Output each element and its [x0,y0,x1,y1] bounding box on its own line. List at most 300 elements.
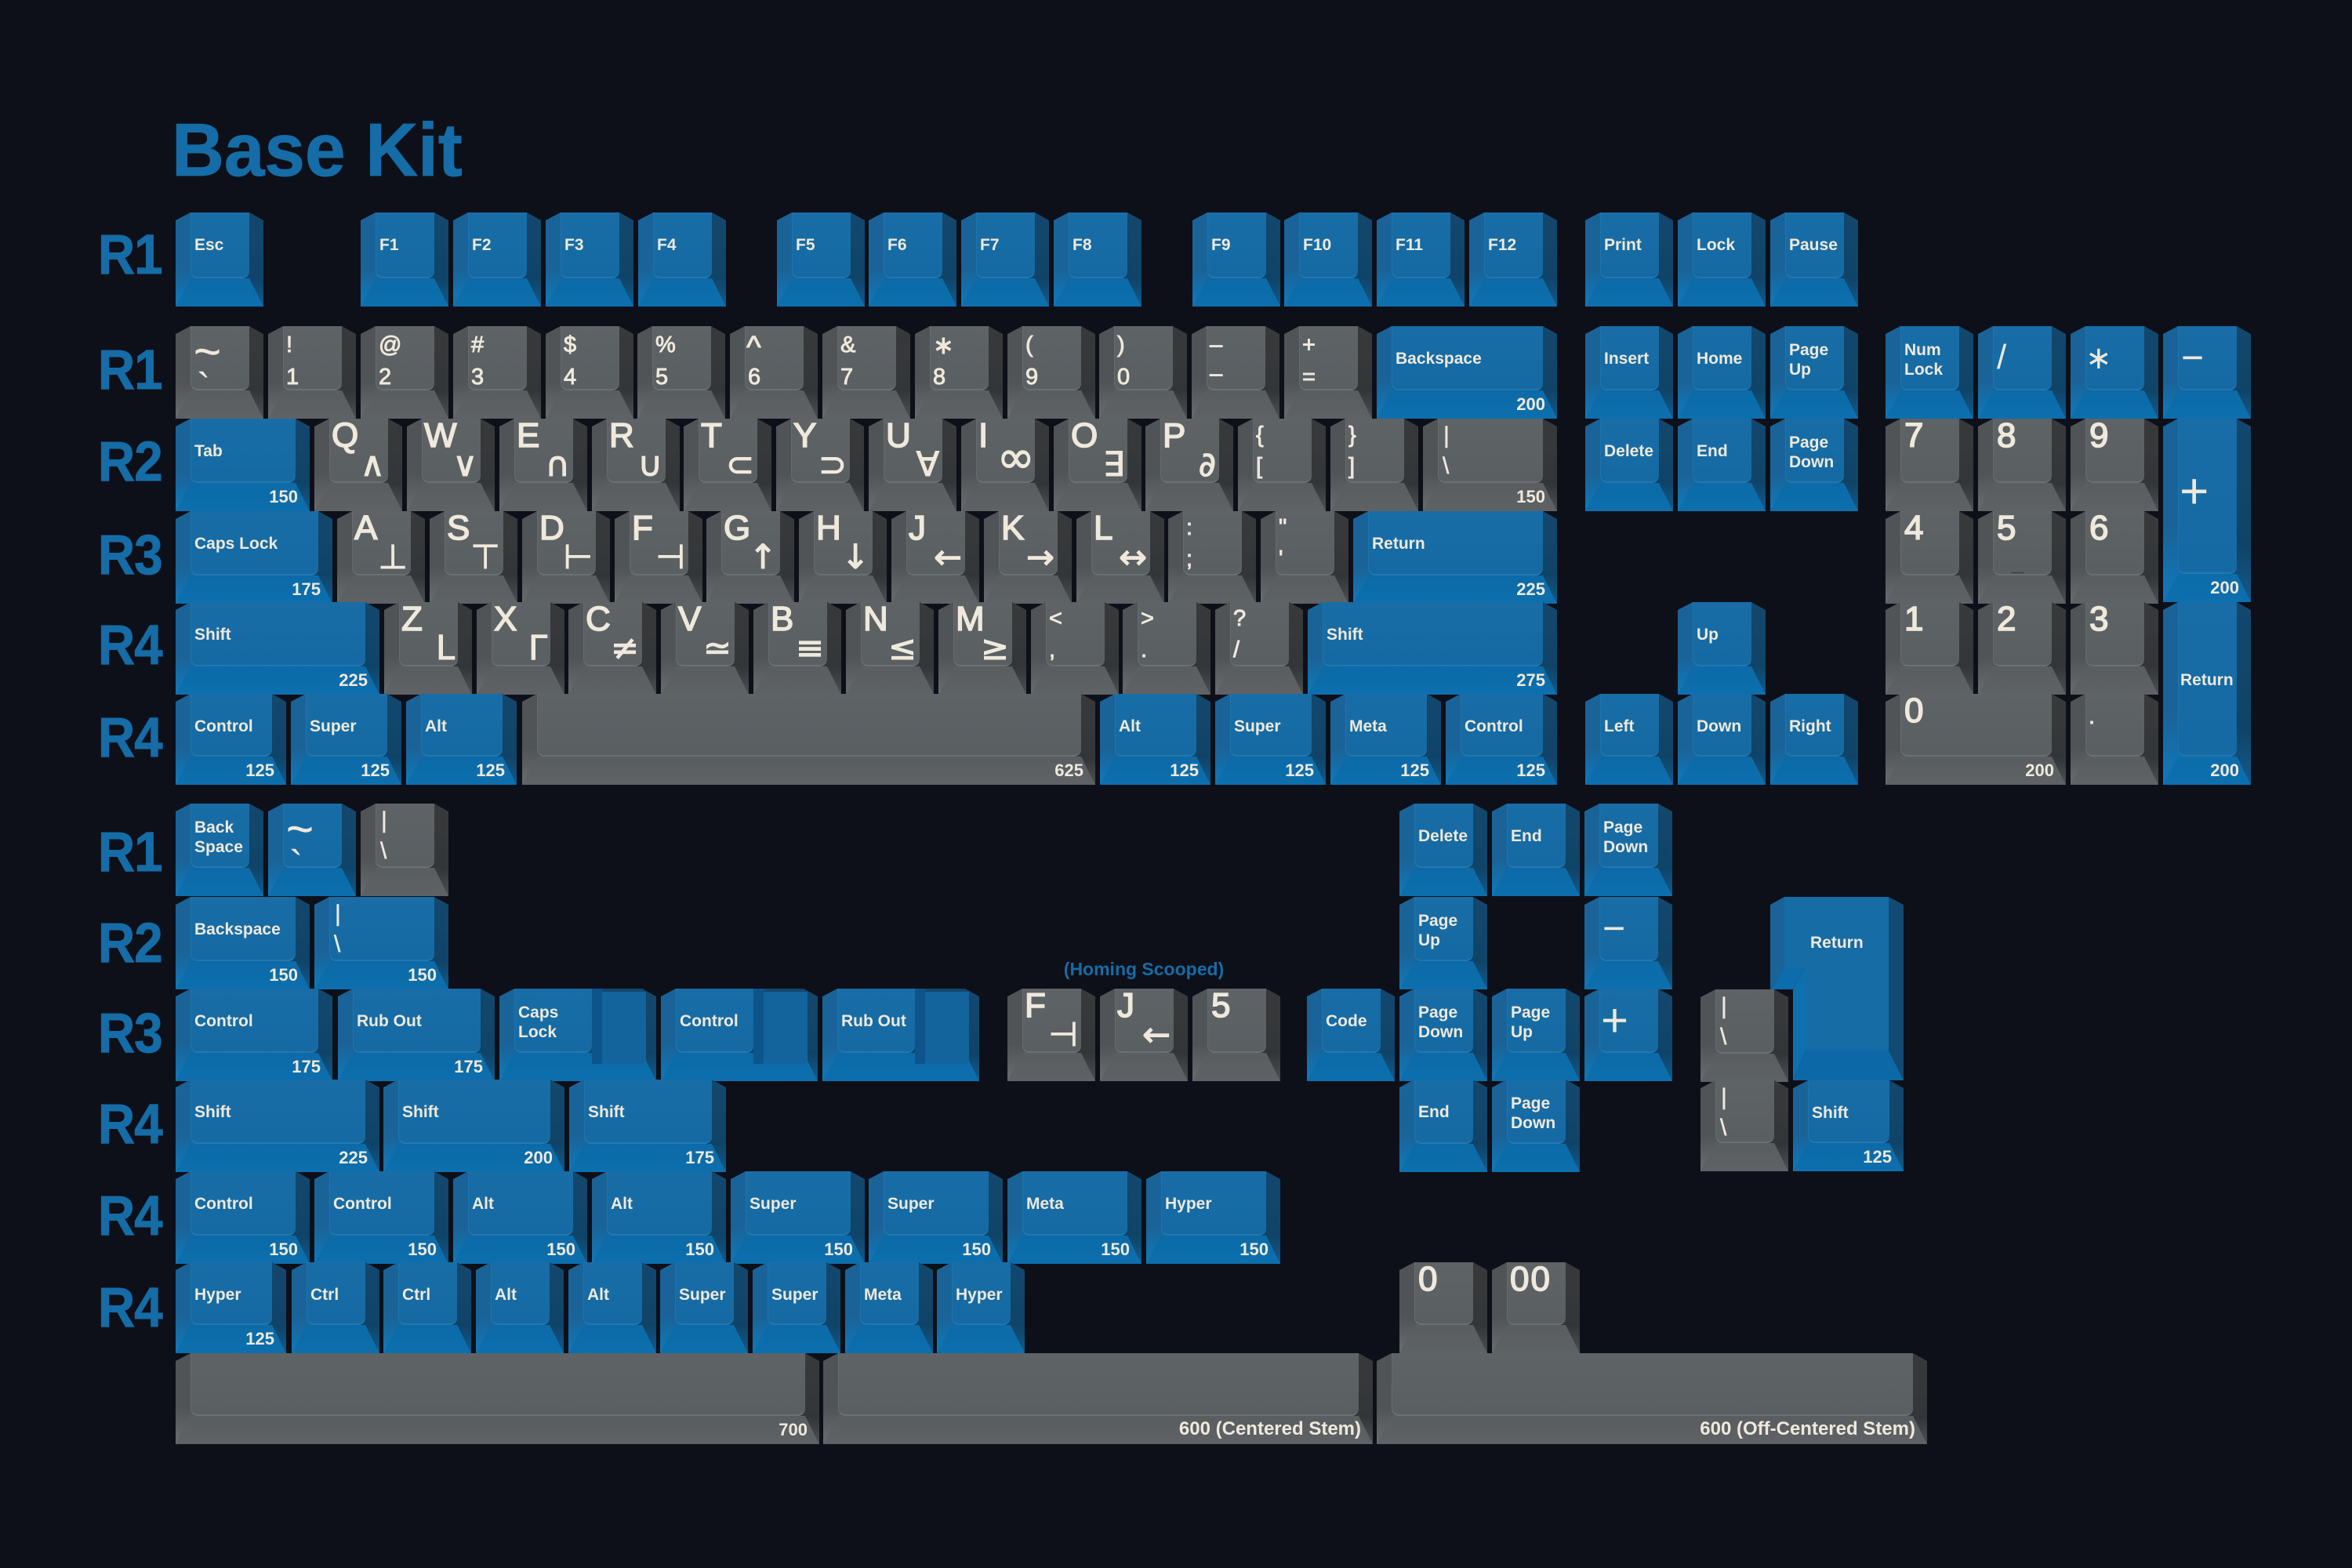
key Page Down [1492,1080,1580,1172]
key Code [1307,989,1395,1081]
key E: E [517,416,539,455]
key Alt: Alt [425,717,447,735]
key Return: Return [1372,535,1425,553]
key Q: ∧ [361,445,385,485]
key homing F: F [1025,986,1046,1025]
key Page Up [1770,326,1858,419]
key F3 [546,212,633,307]
key I: ∞ [997,430,1035,484]
row labels: extras [98,822,163,1339]
key F: ⊣ [656,538,685,577]
key Hyper 125: 125 [245,1329,274,1348]
key Shift 200: Shift [402,1103,439,1121]
key 6 [730,326,818,419]
key G: ↑ [749,538,777,577]
key J: ← [934,538,962,577]
title: Base Kit [172,108,463,192]
key Super: Super [679,1286,726,1304]
key Esc [176,212,263,307]
key homing 5 [1192,989,1280,1081]
key Shift 125: 125 [1863,1147,1892,1167]
key minus [1584,897,1672,989]
key Num Lock: Lock [1904,361,1943,379]
key W [407,419,495,511]
key Code: Code [1326,1012,1367,1030]
key numpad Return: 200 [2210,760,2239,780]
key Control 150 [176,1171,310,1264]
key 2: 2 [1997,600,2016,638]
key L: ↔ [1119,538,1147,577]
key Meta: Meta [864,1286,902,1304]
key Shift 200: 200 [524,1148,553,1167]
key Q: Q [332,416,358,455]
key tilde blue [268,804,356,896]
key numpad dot: . [2089,704,2095,729]
key backslash gray [361,804,448,896]
key 9: ( [1025,332,1033,358]
panel: spacebars [176,1353,1927,1444]
key backslash gray [1700,1080,1788,1171]
key F8 [1054,212,1142,307]
key Shift 125 [1793,1080,1904,1171]
key Shift 175 [569,1080,726,1172]
key 2 [1978,602,2066,695]
key Ctrl [383,1262,471,1353]
key T: T [701,416,722,455]
key Page Down: Page [1418,1004,1457,1022]
key 5: – [2011,558,2024,584]
key Up: Up [1697,626,1719,644]
key Hyper: Hyper [956,1286,1003,1304]
key Page Up: Page [1789,341,1828,359]
key ISO Return: Return [1810,934,1864,952]
key 4 [546,326,633,419]
key spacebar 700: 700 [779,1420,808,1439]
key Backspace 150: Backspace [194,920,281,938]
key Page Down: Page [1789,434,1828,452]
key U: ∀ [916,445,939,485]
key S: S [447,509,470,547]
key 6 [2071,511,2158,604]
key Super [1215,694,1326,785]
key stepped Control: Control [680,1012,739,1030]
key F4 [638,212,726,307]
key Backspace [1377,326,1557,419]
key 9: 9 [1025,365,1038,390]
key 0 [1399,1262,1487,1353]
key Control: Control [1465,717,1523,735]
key quote: " [1279,515,1287,540]
key stepped Caps Lock [499,989,656,1081]
key Y: ⊃ [818,445,847,485]
key Backspace 150 [176,897,310,989]
key backslash gray: | [1721,993,1727,1019]
key minus: − [1602,906,1625,950]
key H [799,511,887,604]
key Shift 275 [1308,602,1557,695]
key Delete: Delete [1604,442,1653,460]
key F: F [632,509,653,547]
key stepped Rub Out [822,989,979,1081]
key Super: Super [310,717,357,735]
key Page Down: Down [1418,1023,1463,1041]
panel: alpha block [176,326,1557,785]
key B [753,602,841,695]
key F4: F4 [657,236,677,254]
key numpad slash: / [1997,338,2006,376]
key F6: F6 [887,236,907,254]
key Page Up: Page [1511,1004,1550,1022]
row label R1: R1 [98,224,162,286]
key 1 [268,326,356,419]
key Shift 225: Shift [194,1103,231,1121]
key backslash 150: 150 [1516,487,1545,506]
panel: extras nav [1307,804,1672,1353]
row label R2: R2 [98,431,162,493]
key 8: 8 [933,365,946,390]
key 5: 5 [655,365,668,390]
key P: P [1163,416,1185,455]
key Print [1585,212,1673,307]
key Shift 175: 175 [685,1148,714,1167]
key Alt 150: 150 [546,1240,575,1259]
key Page Down: Page [1511,1094,1550,1112]
key backslash gray: \ [1720,1115,1726,1141]
key backslash 150: \ [1443,453,1449,479]
key Page Up: Up [1789,361,1811,379]
key comma: < [1049,606,1062,631]
key Shift 225: 225 [339,670,368,690]
key tilde [176,326,263,419]
key Y [776,419,864,511]
key Page Up: Up [1511,1023,1533,1041]
key Lock [1678,212,1766,307]
key F1: F1 [379,236,399,254]
key 9 [2071,419,2158,511]
key Ctrl [292,1262,379,1353]
key period: . [1141,637,1147,662]
key B: B [771,600,793,638]
key 6: 6 [748,365,760,390]
key ISO Return [1770,897,1904,1080]
row label R2: R2 [98,913,162,975]
key C: ≠ [611,629,639,668]
key Backspace: 200 [1516,394,1545,414]
key Meta [1330,694,1441,785]
key quote: ' [1279,546,1283,572]
key F10 [1284,212,1372,307]
key numpad dot [2071,694,2158,785]
key Num Lock: Num [1904,341,1941,359]
key 7 [822,326,910,419]
key numpad Return [2163,602,2251,785]
key Rub Out 175: 175 [454,1057,483,1076]
key spacebar 625 [522,694,1095,785]
key minus: – [1210,361,1222,387]
key F5: F5 [796,236,815,254]
key Control [176,694,286,785]
key semicolon [1168,511,1256,604]
panel: extras left [176,804,1280,1353]
key homing J [1100,989,1188,1081]
key Alt [476,1262,564,1353]
key spacebar 600 centered stem: 600 (Centered Stem) [1179,1418,1361,1439]
key 2 [361,326,448,419]
key T [684,419,771,511]
key F6 [869,212,956,307]
panel: function row [176,212,1858,307]
key Control: 125 [245,760,274,780]
key M: ≥ [981,629,1009,668]
key F5 [777,212,865,307]
key R: ∪ [638,445,662,485]
key Meta [845,1262,933,1353]
key Super 150: Super [750,1195,797,1213]
key Shift 125: Shift [1812,1104,1849,1122]
key Meta 150 [1007,1171,1142,1264]
key backslash 150 blue: \ [334,931,340,957]
row label R4: R4 [98,1094,162,1156]
key I [961,419,1049,511]
key Control 150: 150 [408,1240,437,1259]
key Super [660,1262,748,1353]
key Hyper 150: 150 [1240,1240,1269,1259]
key numpad asterisk: ∗ [2085,340,2112,376]
key F9 [1192,212,1280,307]
key N: ≤ [888,629,916,668]
key Y: Y [793,416,816,455]
key backslash 150 blue [314,897,448,989]
key Page Down: Down [1511,1114,1555,1132]
key 3: 3 [2089,600,2108,638]
key Left [1585,694,1673,785]
key F2 [453,212,541,307]
key 5 [637,326,725,419]
key Hyper 150: Hyper [1165,1195,1212,1213]
key A: ⊥ [379,538,408,577]
key Delete: Delete [1418,827,1468,845]
key C: C [586,600,611,638]
key 5 [1978,511,2066,604]
key 1: 1 [1904,600,1923,638]
key Hyper [937,1262,1025,1353]
key backslash 150 blue: | [335,901,341,927]
key minus: – [1210,332,1222,358]
key X: X [494,600,517,638]
key Meta: Meta [1349,717,1387,735]
key Alt: Alt [587,1286,609,1304]
key U: U [886,416,911,455]
key 0 [1886,694,2066,785]
key 9: 9 [2089,416,2108,455]
key Shift 225: 225 [339,1148,368,1167]
key I: I [978,416,988,455]
key Back Space: Back [194,818,234,837]
key Return [1353,511,1557,604]
key Caps Lock [176,511,332,604]
key period [1123,602,1210,695]
key Delete [1399,804,1487,896]
panel: ISO cluster [1700,897,1904,1171]
key End: End [1418,1103,1450,1121]
key Home: Home [1697,350,1742,368]
key Super 150: 150 [824,1240,853,1259]
key numpad minus [2163,326,2251,419]
key Delete [1585,419,1673,511]
key stepped Rub Out: Rub Out [841,1012,906,1030]
key O: O [1071,416,1098,455]
key X [477,602,564,695]
key numpad minus: − [2181,336,2204,379]
key 00: 00 [1510,1260,1552,1298]
key J: J [909,509,926,547]
key Page Down: Down [1603,838,1648,856]
key Control 175: Control [194,1012,253,1030]
key F11 [1377,212,1465,307]
key Control: 125 [1516,760,1545,780]
key Page Down: Page [1603,818,1642,837]
key 0: 200 [2025,760,2054,780]
key Hyper 125: Hyper [194,1286,241,1304]
row label R4: R4 [98,707,162,769]
key Page Down [1399,989,1487,1081]
key Ctrl: Ctrl [310,1286,339,1304]
key K: K [1001,509,1024,547]
key F [615,511,702,604]
key slash: / [1233,637,1240,662]
key tilde blue: ` [289,843,303,888]
key 5: % [655,332,676,358]
key Tab: Tab [194,442,223,460]
key numpad asterisk [2071,326,2158,419]
key Pause [1770,212,1858,307]
key Alt [406,694,517,785]
key plus [1584,989,1672,1081]
key F2: F2 [472,236,492,254]
key tilde blue: ~ [286,803,314,855]
key Control: Control [194,717,253,735]
key S: ⊤ [471,538,500,577]
key homing J: ← [1142,1015,1171,1054]
key Z [384,602,472,695]
key Left: Left [1604,717,1634,735]
row label R1: R1 [98,339,162,401]
key 4: $ [564,332,576,358]
key Shift 275: Shift [1327,626,1363,644]
key V: ≃ [703,629,731,668]
key V: V [678,600,701,638]
row label R4: R4 [98,1277,162,1339]
key 0: 0 [1904,691,1923,730]
key F9: F9 [1211,236,1231,254]
key Down: Down [1697,717,1741,735]
key Super 150 [869,1171,1003,1264]
key plus: + [1601,994,1628,1047]
key 00 [1492,1262,1580,1353]
key W: W [424,416,457,455]
key N [846,602,934,695]
key A [337,511,425,604]
row label R4: R4 [98,1185,162,1247]
key Caps Lock: 175 [292,579,321,599]
key backslash gray [1700,989,1788,1082]
key P: ∂ [1199,445,1216,485]
key Back Space [176,804,263,896]
key comma [1031,602,1119,695]
key Page Up: Page [1418,912,1457,930]
key End: End [1697,442,1728,460]
key spacebar 700 [176,1353,819,1444]
key Shift 275: 275 [1516,670,1545,690]
key F12 [1469,212,1557,307]
key left bracket: { [1256,423,1264,448]
key Shift 225: Shift [194,626,231,644]
key L: L [1094,509,1112,547]
key H: ↓ [841,538,869,577]
key V [661,602,749,695]
key numpad plus [2163,419,2251,602]
key Control 175: 175 [292,1057,321,1076]
key F1 [361,212,448,307]
key tilde: ~ [194,325,221,378]
key G: G [724,509,750,547]
key homing 5: 5 [1211,986,1230,1025]
key M [938,602,1026,695]
key 6: 6 [2089,509,2108,547]
key backslash gray: \ [1720,1024,1726,1050]
row labels: base layout [98,224,163,769]
key F12: F12 [1488,236,1516,254]
key A: A [354,509,377,547]
key backslash 150: | [1443,423,1450,448]
key F3: F3 [564,236,584,254]
key Super: 125 [361,760,390,780]
key K [984,511,1072,604]
key Control 150: Control [333,1195,392,1213]
key 3 [453,326,541,419]
key right bracket [1330,419,1418,511]
row label R1: R1 [98,822,162,884]
key Super: 125 [1285,760,1314,780]
key Control [1446,694,1557,785]
key Page Down [1770,419,1858,511]
key H: H [816,509,841,547]
panel: numpad [1886,326,2251,785]
key equals: = [1302,365,1316,390]
key 4 [1886,511,1973,604]
key W: ∨ [453,445,477,485]
key F7: F7 [980,236,1000,254]
key stepped Caps Lock: Caps [518,1004,558,1022]
key 8: ∗ [933,330,954,360]
key Shift 200 [383,1080,564,1172]
key Page Down [1584,804,1672,896]
key Alt 150 [453,1171,587,1264]
panel: navigation cluster [1585,326,1858,785]
key backslash gray: | [1721,1084,1727,1110]
key Print: Print [1604,236,1642,254]
key Return: 225 [1516,579,1545,599]
key Num Lock [1886,326,1973,419]
key Control 150: 150 [269,1240,298,1259]
key Q [314,419,402,511]
key numpad plus: 200 [2210,578,2239,597]
key homing F [1007,989,1095,1081]
key backslash 150 blue: 150 [408,965,437,985]
key F8: F8 [1073,236,1092,254]
key 6: ^ [746,330,761,365]
key 1: 1 [286,365,299,390]
